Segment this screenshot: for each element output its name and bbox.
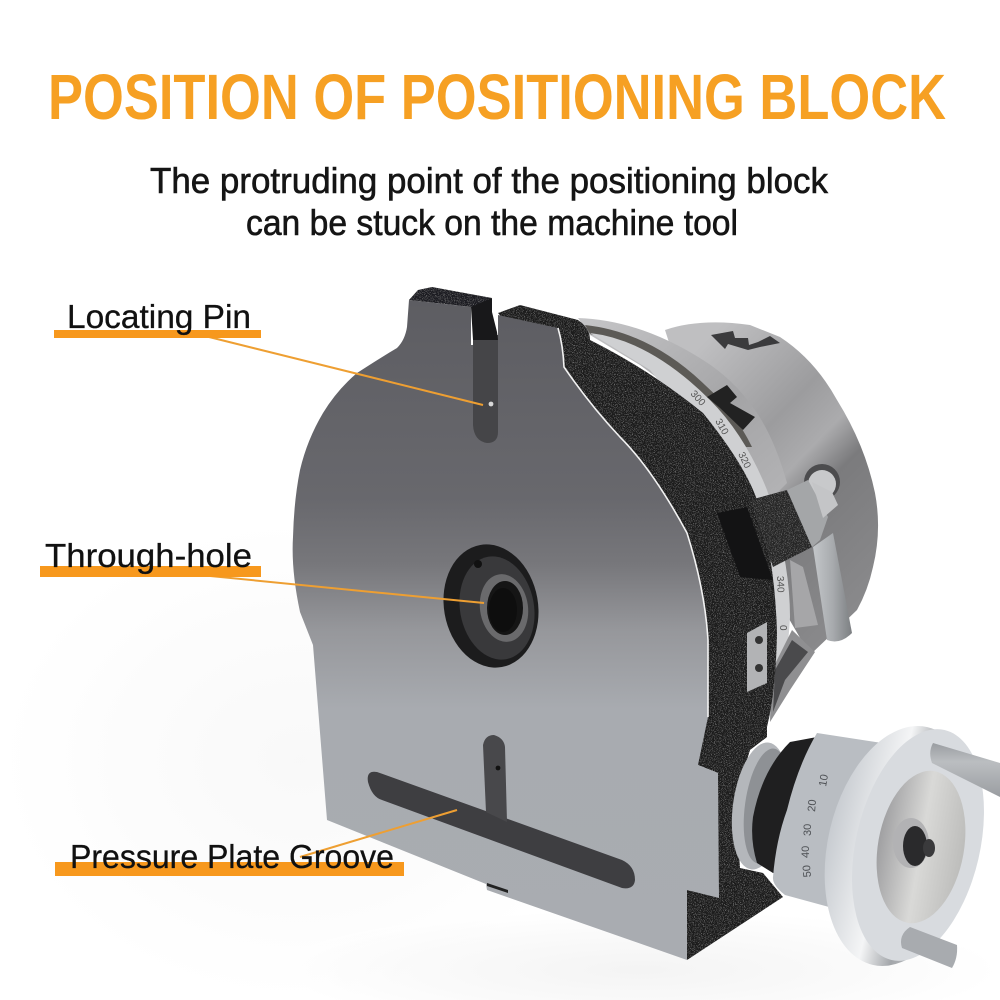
jaw notch	[707, 385, 755, 430]
lever handle	[813, 533, 852, 641]
label: Locating Pin	[67, 298, 251, 335]
wheel recess	[865, 764, 977, 930]
top locating slot	[473, 335, 498, 443]
flange ring	[578, 318, 787, 500]
wheel rim	[802, 711, 998, 981]
wheel hub	[893, 818, 929, 868]
leader line	[200, 575, 484, 603]
bottom knob	[901, 927, 957, 968]
plate	[293, 300, 719, 960]
pressure plate groove	[368, 735, 635, 888]
scale numbers: 0	[777, 625, 788, 631]
lever clamp	[787, 480, 828, 547]
dark block on body	[717, 507, 773, 580]
scale inner dark groove	[585, 325, 752, 447]
scale numbers: 320	[735, 450, 753, 471]
subtitle	[150, 160, 829, 243]
callout: Locating Pin	[54, 298, 483, 405]
subtitle: can be stuck on the machine tool	[246, 202, 738, 243]
center hub	[434, 537, 548, 675]
black cast body	[498, 305, 783, 960]
subtitle: The protruding point of the positioning block	[150, 160, 829, 201]
drum numbers: 40	[800, 846, 812, 858]
drum numbers: 20	[806, 799, 819, 812]
scale numbers: 300	[688, 389, 707, 409]
leader line	[205, 336, 483, 405]
graduated scale ring	[590, 333, 790, 722]
scale numbers: 310	[712, 417, 730, 437]
chuck screw	[804, 464, 840, 500]
drum numbers	[800, 773, 831, 878]
lower flange band	[790, 560, 818, 628]
handwheel assembly	[724, 711, 1000, 981]
underline bar	[40, 566, 261, 577]
plate bright edge	[558, 328, 708, 717]
scale numbers: 340	[774, 576, 786, 593]
lever arm	[750, 490, 812, 567]
graduated drum	[773, 733, 882, 910]
callout: Pressure Plate Groove	[55, 810, 457, 876]
chuck cylinder	[665, 322, 878, 655]
lower jaw	[770, 630, 815, 722]
black strip top left tab	[409, 287, 492, 310]
chuck jaw slot	[711, 331, 780, 350]
collar	[724, 739, 796, 873]
locating pin	[489, 402, 493, 406]
top handle	[930, 743, 1000, 797]
underline bar	[55, 862, 404, 876]
bracket	[747, 622, 767, 692]
wheel face	[831, 716, 1000, 974]
scale numbers	[688, 389, 788, 631]
rotary table machine	[293, 287, 1000, 981]
drum numbers: 10	[817, 773, 831, 788]
underline bar	[54, 330, 261, 338]
label: Pressure Plate Groove	[70, 838, 394, 875]
label: Through-hole	[45, 537, 252, 574]
leader line	[300, 810, 457, 857]
top slot dark wall	[471, 298, 498, 340]
drum numbers: 30	[802, 824, 814, 836]
bottom notch	[487, 883, 508, 893]
knurled sleeve	[752, 737, 817, 878]
drum numbers: 50	[801, 865, 814, 878]
callout: Through-hole	[40, 537, 484, 603]
